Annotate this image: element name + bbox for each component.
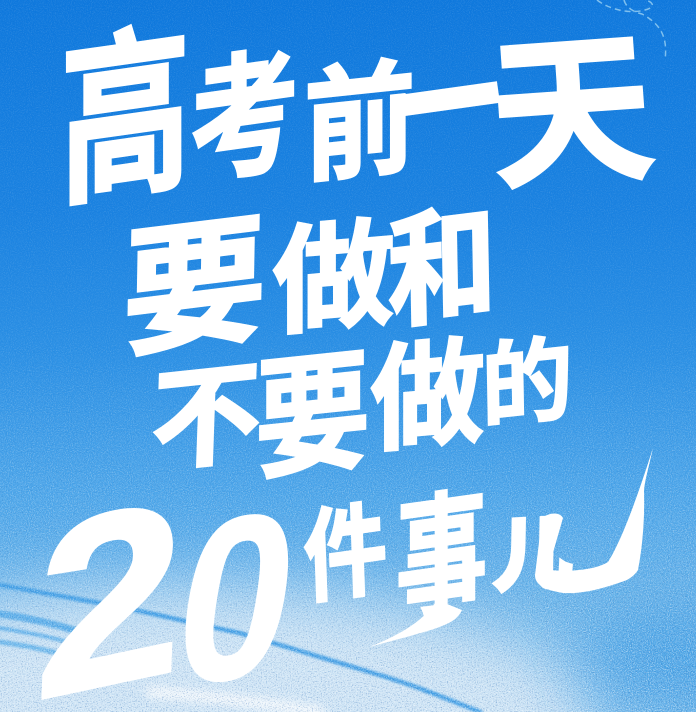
title character: 高: 高 xyxy=(60,10,191,229)
title character: 天: 天 xyxy=(484,17,660,211)
heading character: 的: 的 xyxy=(481,327,574,440)
icon: dashed paper plane trail xyxy=(597,0,666,60)
heading character: 要: 要 xyxy=(255,338,370,497)
heading character: 做: 做 xyxy=(272,207,396,350)
title character: 一: 一 xyxy=(392,32,510,178)
heading character: 事: 事 xyxy=(396,479,487,641)
heading character: 件: 件 xyxy=(302,492,389,617)
heading line: 要做和 xyxy=(121,193,498,375)
title character: 前: 前 xyxy=(304,49,415,199)
heading line: 件事儿 xyxy=(302,448,653,647)
heading character: 不: 不 xyxy=(149,351,263,486)
title character: 考: 考 xyxy=(190,36,299,200)
title: 高考前一天 xyxy=(60,10,660,229)
heading character: 儿: 儿 xyxy=(494,509,573,601)
number: 20 xyxy=(32,445,314,712)
background: deeper blue lower right xyxy=(580,610,696,710)
heading character: 要: 要 xyxy=(121,202,268,375)
heading line: 不要做的 xyxy=(149,327,574,497)
background: pale cloud lower left xyxy=(0,590,600,712)
heading character: 和: 和 xyxy=(386,193,498,344)
brush stroke: 事 sweeping tail xyxy=(369,600,462,647)
brush stroke: 儿 rising tail xyxy=(535,448,653,593)
heading character: 做: 做 xyxy=(370,327,486,467)
brush streaks xyxy=(0,585,480,712)
